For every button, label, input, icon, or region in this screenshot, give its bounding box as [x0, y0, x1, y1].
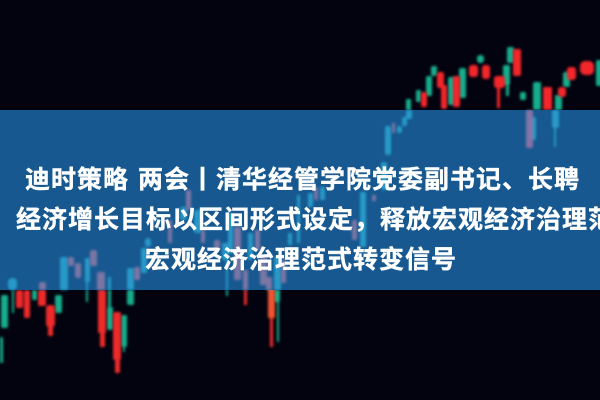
banner [0, 110, 600, 290]
blue candles seen through banner [8, 110, 559, 290]
title line 2: 经济增长目标以区间形式设定，释放宏观经济治理范 [16, 206, 600, 234]
green candles, upper right [406, 47, 600, 110]
pink candles seen through banner [39, 110, 533, 290]
red candles, lower area [16, 285, 275, 373]
red candles, upper right [421, 49, 594, 110]
green candles, lower area [0, 290, 280, 363]
title line 3: 宏观经济治理范式转变信号 [145, 246, 457, 274]
title line 1: 迪时策略 两会丨清华经管学院党委副书记、长聘 [25, 166, 580, 194]
